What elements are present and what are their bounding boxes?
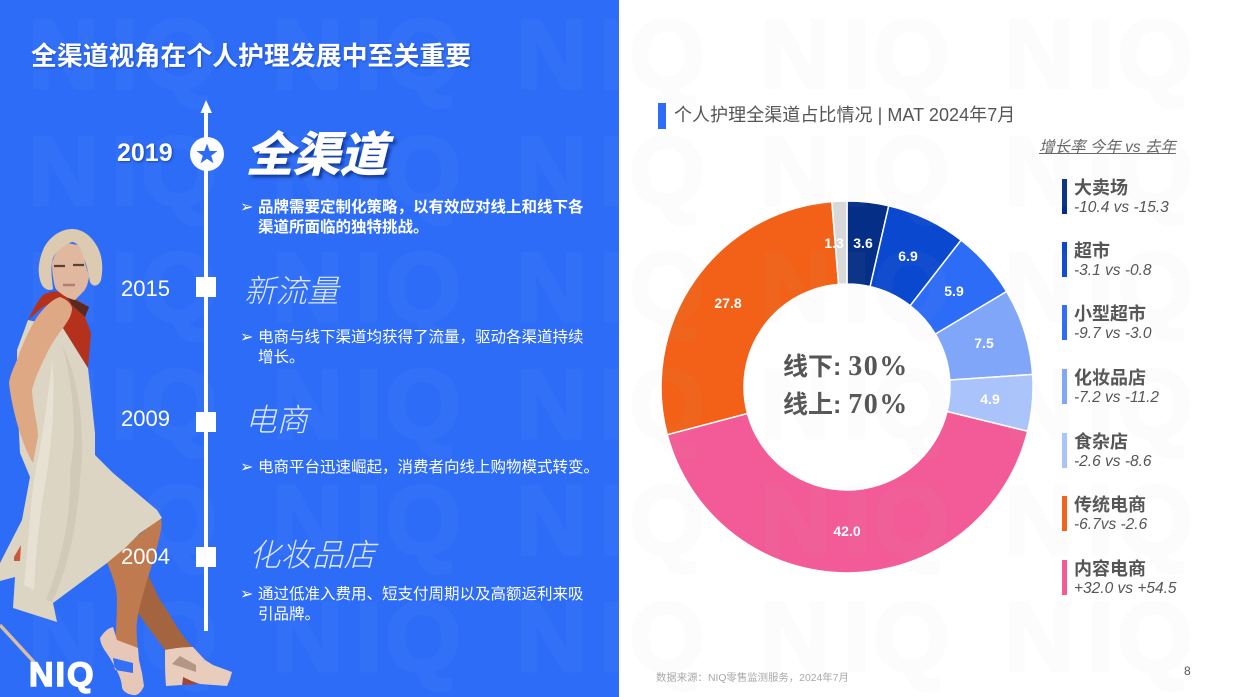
face [52, 243, 89, 300]
back leg [138, 575, 193, 650]
legend: 传统电商: -6.7vs -2.6 [1074, 516, 1147, 533]
milestone: 2004 [196, 547, 216, 567]
arm [9, 297, 72, 463]
heading: 全渠道: 全渠道 [246, 128, 387, 181]
legend: 食杂店: 食杂店 [1074, 432, 1128, 452]
heading: 电商: 电商 [245, 402, 308, 438]
text: 全渠道 description: 品牌需要定制化策略，以有效应对线上和线下各 [258, 199, 584, 216]
milestone: 2009 [196, 412, 216, 432]
panel: left blue timeline: NIQNIQNI [28, 582, 619, 692]
legend caption: 增长率 今年 vs 去年 [1039, 139, 1176, 156]
segment: 超市 6.9 [870, 206, 961, 306]
logo: NIQ: NIQ [29, 656, 95, 694]
segment: 内容电商 42.0 [667, 412, 1028, 573]
data labels: 5.9 [944, 283, 964, 299]
panel: left blue timeline: NIQNIQNI [28, 116, 619, 226]
text: 化妆品店 description [240, 584, 584, 622]
legend: 化妆品店: -7.2 vs -11.2 [1074, 389, 1159, 406]
text: 新流量 description [240, 327, 584, 366]
hair [39, 229, 102, 290]
segment: 食杂店 4.9 [947, 374, 1033, 431]
legend: 传统电商: 传统电商 [1074, 495, 1146, 515]
panel: left blue timeline: NIQNIQNI [28, 0, 619, 109]
legend: 化妆品店 [1062, 368, 1159, 406]
segment: 小型超市 5.9 [910, 240, 1007, 334]
legend: 内容电商 [1062, 559, 1177, 597]
panel: right channel share [619, 0, 1240, 697]
heading: 新流量: 新流量 [244, 273, 339, 309]
data labels: 27.8 [714, 295, 742, 311]
milestone: 2015 [196, 277, 216, 297]
panel: left blue timeline: NIQNIQNI [28, 232, 619, 342]
segment: 化妆品店 7.5 [935, 291, 1033, 380]
left shoe [100, 627, 144, 695]
panel: left blue timeline: ➢ [240, 457, 253, 476]
panel: left blue timeline: ➢ [240, 327, 253, 346]
data labels: 3.6 [853, 235, 873, 251]
text: 电商 description: 电商平台迅速崛起，消费者向线上购物模式转变。 [258, 459, 599, 476]
title: 全渠道视角在个人护理发展中至关重要 [31, 43, 471, 71]
data labels: 6.9 [898, 248, 918, 264]
text: 全渠道 description: 渠道所面临的独特挑战。 [258, 218, 429, 236]
donut centre: 线下 share: 线下: 30% [783, 351, 909, 382]
data labels: 42.0 [833, 523, 861, 539]
source note: 数据来源：NIQ零售监测服务，2024年7月 [656, 673, 849, 684]
legend: 食杂店: -2.6 vs -8.6 [1074, 453, 1152, 470]
legend: 化妆品店: 化妆品店 [1074, 368, 1146, 388]
illustration: woman in cream dress [0, 229, 232, 696]
data labels: 7.5 [974, 335, 994, 351]
segment: 传统电商 27.8 [661, 202, 839, 435]
donut chart [662, 202, 1032, 572]
legend: 内容电商: 内容电商 [1074, 559, 1146, 579]
text: 全渠道 description [240, 197, 584, 236]
legend: 小型超市: -9.7 vs -3.0 [1074, 325, 1152, 342]
year 2019: 2019 [117, 139, 173, 167]
year 2015: 2015 [121, 276, 170, 301]
panel: left blue timeline: NIQNIQNI [28, 349, 619, 459]
data labels [714, 235, 1000, 539]
text: 化妆品店 description: 通过低准入费用、短支付周期以及高额返利来吸 [258, 586, 584, 603]
legend: 大卖场: 大卖场 [1074, 178, 1128, 198]
segment: 大卖场 3.6 [847, 201, 889, 287]
text: 化妆品店 description: 引品牌。 [258, 606, 320, 622]
legend: 超市 [1062, 241, 1152, 279]
legend: 超市: 超市 [1074, 241, 1110, 261]
year 2004: 2004 [121, 544, 170, 569]
heading: 化妆品店: 化妆品店 [249, 537, 375, 573]
front leg [106, 518, 162, 650]
chart heading: 个人护理全渠道占比情况 | MAT 2024年7月 [674, 105, 1015, 125]
milestone: star 2019 [190, 137, 224, 171]
legend: 超市: -3.1 vs -0.8 [1074, 262, 1152, 279]
chart heading marker [658, 103, 666, 129]
data labels: 1.3 [824, 235, 844, 251]
data labels: 4.9 [980, 391, 1000, 407]
legend: 内容电商: +32.0 vs +54.5 [1074, 580, 1177, 597]
segment: other 1.3 [832, 201, 847, 284]
dress [0, 320, 162, 622]
red collar [28, 291, 91, 368]
year 2009: 2009 [121, 406, 170, 431]
legend: 小型超市 [1062, 304, 1152, 342]
page number: 8 [1184, 664, 1191, 678]
right shoe [165, 647, 232, 686]
legend: 食杂店 [1062, 432, 1152, 470]
donut centre: 线上 share: 线上: 70% [783, 389, 909, 420]
panel: left blue timeline: NIQNIQNI [28, 465, 619, 575]
panel: left blue timeline [0, 0, 619, 697]
legend: 大卖场 [1062, 178, 1169, 216]
text: 新流量 description: 电商与线下渠道均获得了流量，驱动各渠道持续 [258, 329, 584, 346]
panel: left blue timeline: ➢ [240, 197, 253, 216]
text: 新流量 description: 增长。 [258, 348, 305, 366]
legend: 传统电商 [1062, 495, 1148, 533]
legend: 大卖场: -10.4 vs -15.3 [1074, 199, 1169, 216]
timeline axis with arrow [190, 100, 224, 631]
panel: left blue timeline: ➢ [240, 584, 253, 603]
legend: 小型超市: 小型超市 [1074, 304, 1146, 324]
